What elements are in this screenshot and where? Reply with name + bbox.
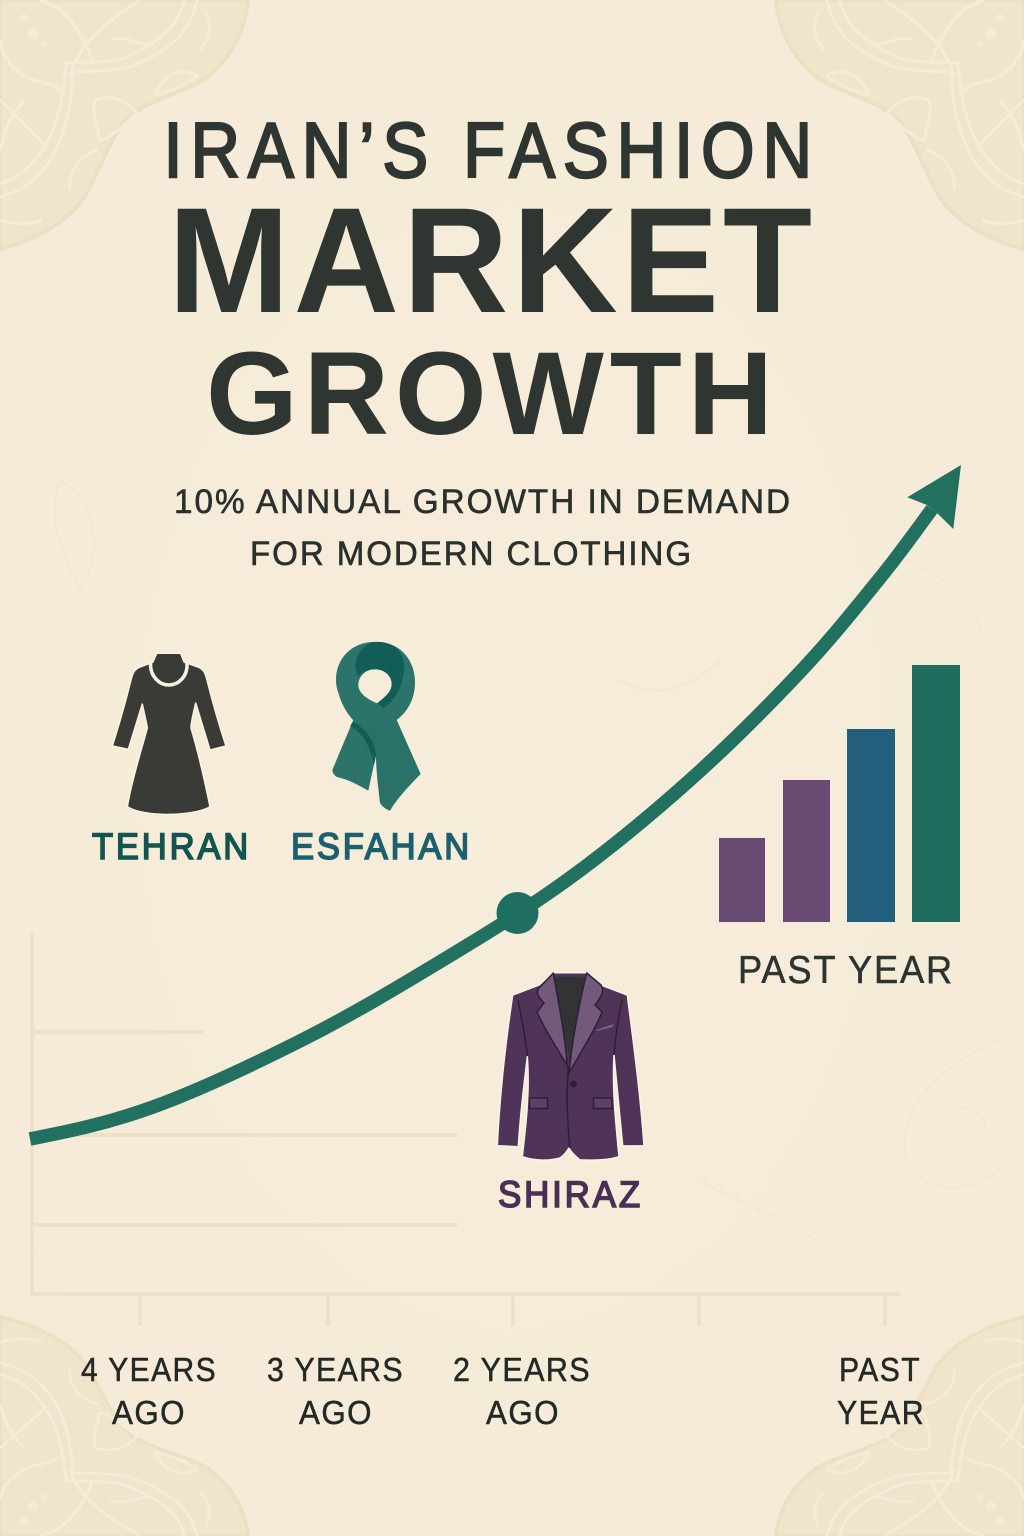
icon: scarf bbox=[332, 642, 421, 811]
jacket pockets bbox=[530, 1098, 612, 1108]
ornament: bottom left corner bbox=[0, 1317, 248, 1536]
axis label: 2 years ago bbox=[453, 1351, 591, 1431]
jacket button bbox=[570, 1080, 577, 1088]
scarf cross band bbox=[338, 690, 397, 732]
arrow line bbox=[30, 509, 932, 1139]
growth arrow bbox=[30, 465, 961, 1139]
scarf loop bbox=[336, 642, 415, 720]
bar chart bbox=[719, 665, 960, 922]
arrowhead bbox=[907, 465, 961, 529]
scarf inner shadow bbox=[355, 642, 404, 708]
subtitle line 1: 10% ANNUAL GROWTH IN DEMAND bbox=[174, 483, 792, 521]
bar 3 bbox=[847, 729, 895, 922]
bar 1 bbox=[719, 838, 765, 922]
subtitle bbox=[174, 483, 792, 573]
axis label: 4 years ago: AGO bbox=[112, 1394, 186, 1431]
axis label: 2 years ago: AGO bbox=[486, 1394, 560, 1431]
chart axes and grid bbox=[30, 932, 900, 1326]
jacket left lapel bbox=[537, 973, 567, 1065]
scarf fold shadow bbox=[350, 722, 376, 765]
milestone dot bbox=[496, 892, 538, 934]
icon: dress bbox=[112, 653, 226, 814]
jacket shirt bbox=[553, 977, 587, 1062]
jacket seams bbox=[518, 1000, 622, 1148]
axis label: past year: YEAR bbox=[837, 1394, 925, 1431]
jacket body bbox=[497, 973, 644, 1160]
axis label: past year bbox=[837, 1351, 925, 1431]
ornament: bottom right corner bbox=[776, 1317, 1024, 1536]
subtitle line 2: FOR MODERN CLOTHING bbox=[250, 535, 693, 573]
axis labels bbox=[81, 1351, 925, 1431]
scarf left tail bbox=[332, 720, 385, 791]
label: Esfahan: ESFAHAN bbox=[291, 826, 472, 867]
jacket pocket square bbox=[596, 1024, 614, 1031]
label: Past Year bar chart: PAST YEAR bbox=[738, 949, 954, 992]
ornament: top left corner bbox=[0, 0, 248, 249]
axis label: 4 years ago bbox=[81, 1351, 217, 1431]
ornament: top right corner bbox=[776, 0, 1024, 249]
scarf right tail bbox=[353, 718, 421, 811]
axis label: 3 years ago: 3 YEARS bbox=[267, 1351, 404, 1388]
axis label: 3 years ago bbox=[267, 1351, 404, 1431]
title line: Iran's Fashion: IRAN’S FASHION bbox=[164, 106, 820, 194]
axis label: past year: PAST bbox=[839, 1351, 921, 1388]
jacket right lapel bbox=[569, 973, 603, 1073]
icon: jacket bbox=[497, 973, 644, 1160]
label: Tehran: TEHRAN bbox=[92, 826, 251, 867]
axis label: 3 years ago: AGO bbox=[299, 1394, 373, 1431]
necklace bbox=[150, 663, 187, 685]
title line: Growth: GROWTH bbox=[206, 328, 773, 460]
title line: Market: MARKET bbox=[168, 176, 816, 344]
axis label: 2 years ago: 2 YEARS bbox=[453, 1351, 591, 1388]
bar 2 bbox=[783, 780, 830, 922]
label: Shiraz: SHIRAZ bbox=[498, 1174, 643, 1215]
faint paisley background pattern bbox=[55, 480, 1000, 1260]
title bbox=[164, 106, 820, 460]
axis label: 4 years ago: 4 YEARS bbox=[81, 1351, 217, 1388]
bar 4 bbox=[912, 665, 960, 922]
